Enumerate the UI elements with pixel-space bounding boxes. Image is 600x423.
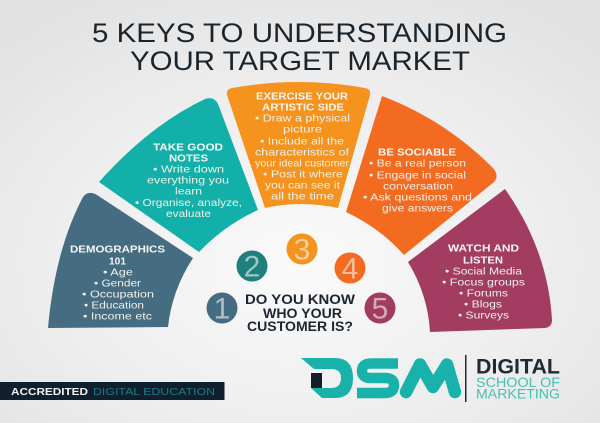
panel: be sociable: • Ask questions and [363,192,472,204]
title [92,18,507,76]
panel: exercise your artistic side: all the time [271,190,334,202]
panel: be sociable: give answers [382,202,453,214]
panel: watch and listen: • Focus groups [442,276,525,288]
accredited banner [0,382,224,400]
panel: watch and listen: LISTEN [463,254,503,266]
panel: exercise your artistic side: EXERCISE YOUR [256,90,348,102]
accredited banner: ACCREDITED [11,386,88,398]
panel: exercise your artistic side: • Draw a physical [255,112,350,124]
panel: watch and listen: • Forums [459,288,508,300]
number 5: 5 [372,292,388,326]
panel: be sociable: BE SOCIABLE [378,146,456,158]
panel: demographics 101: • Age [103,266,133,278]
panel: exercise your artistic side: you can see it [265,180,340,192]
panel: watch and listen: • Social Media [445,266,522,278]
center question: DO YOU KNOW [245,292,355,307]
center question: CUSTOMER IS? [247,319,353,334]
panel: take good notes: • Organise, analyze, [135,197,242,209]
panel: exercise your artistic side: ARTISTIC SIDE [262,102,344,114]
panel: demographics 101: • Gender [94,278,142,290]
panel: exercise your artistic side: • Post it where [263,168,343,180]
number 4 [334,252,366,286]
number 2: 2 [244,250,260,284]
panel: demographics 101: 101 [109,256,126,268]
panel: demographics 101 [48,193,193,328]
logo: DSM [301,358,455,398]
logo wordmark [476,356,560,402]
panel: be sociable: • Be a real person [369,158,466,170]
logo wordmark: DIGITAL [476,356,560,378]
panel: take good notes: NOTES [169,152,208,164]
panel: watch and listen [408,189,552,332]
panel: take good notes: evaluate [166,208,211,220]
number 2 [236,250,268,284]
logo wordmark: SCHOOL OF [476,374,560,390]
panel: watch and listen: • Blogs [464,298,502,310]
panel: exercise your artistic side: your ideal customer [255,158,350,170]
panel: watch and listen: • Surveys [458,310,509,322]
number 5 [364,292,396,326]
panel: be sociable: conversation [383,180,453,192]
accredited banner: DIGITAL EDUCATION [93,386,215,398]
number 3 [286,234,318,266]
panel: take good notes [99,98,258,252]
panel: take good notes: • Write down [153,164,224,176]
number 1 [206,292,238,326]
panel: demographics 101: • Education [84,300,144,312]
panel: demographics 101: DEMOGRAPHICS [70,244,165,256]
panel: take good notes: everything you [147,174,229,186]
panel: be sociable: • Engage in social [369,170,466,182]
title: YOUR TARGET MARKET [130,46,470,76]
panel: be sociable [346,96,497,255]
logo divider [465,355,466,402]
center question [245,292,355,334]
panel: watch and listen: WATCH AND [448,242,519,254]
panel: exercise your artistic side: • Include all the [260,136,344,148]
panel: demographics 101: • Income etc [83,310,152,322]
panel: take good notes: learn [175,186,202,198]
panel: exercise your artistic side: characteristics of [255,146,349,158]
center question: WHO YOUR [263,306,342,321]
panel: take good notes: TAKE GOOD [153,142,223,154]
number 1: 1 [214,292,230,326]
number 3: 3 [294,234,310,266]
logo wordmark: MARKETING [476,386,560,402]
panel: exercise your artistic side [227,82,370,208]
number 4: 4 [342,252,358,286]
panel: exercise your artistic side: picture [283,124,322,136]
panel: demographics 101: • Occupation [82,288,154,300]
title: 5 KEYS TO UNDERSTANDING [92,18,507,48]
